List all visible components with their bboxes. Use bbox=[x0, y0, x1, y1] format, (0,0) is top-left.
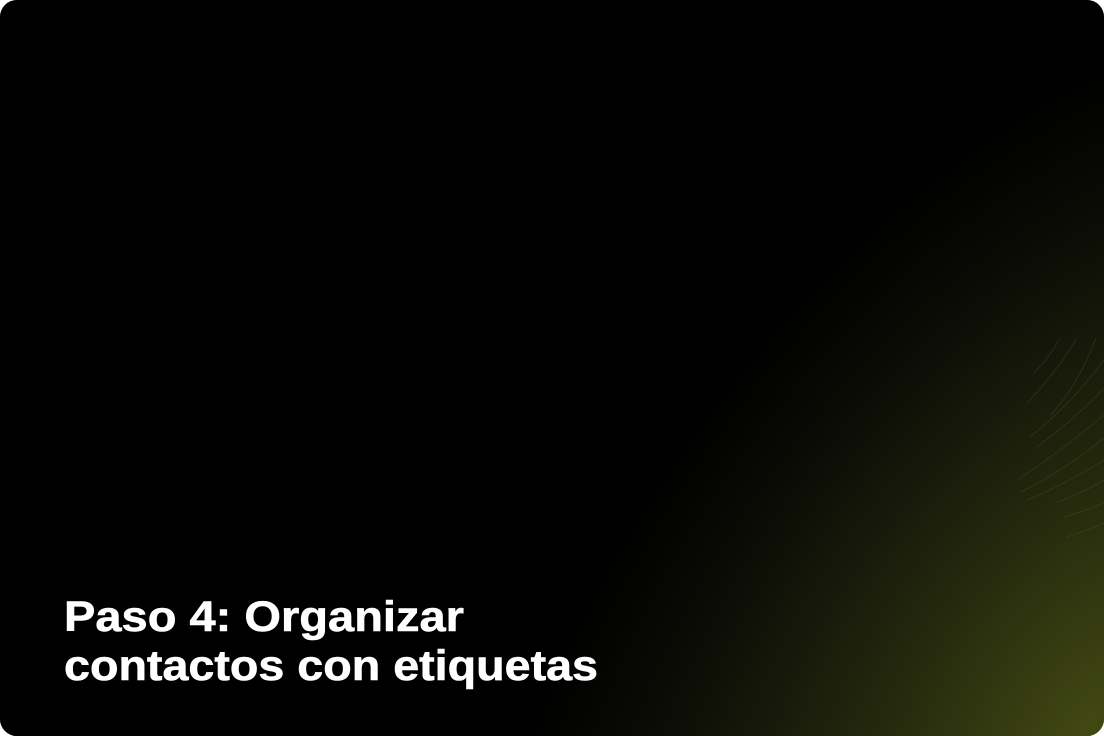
title bbox=[64, 593, 598, 690]
radiating faint lines bbox=[1017, 338, 1104, 537]
title: Paso 4: Organizar bbox=[64, 593, 464, 641]
title: contactos con etiquetas bbox=[64, 642, 598, 690]
